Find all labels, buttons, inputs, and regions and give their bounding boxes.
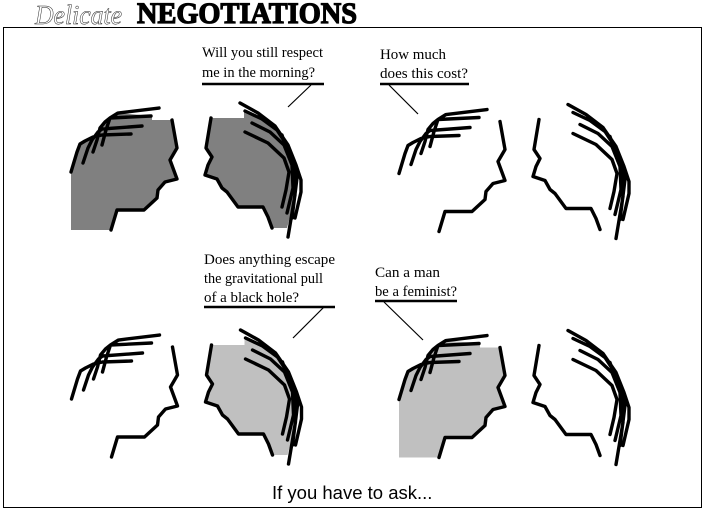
silhouette pair: right face light gray, bottom left — [72, 330, 302, 464]
speech callout: cost: How much — [380, 47, 446, 63]
caption: If you have to ask... — [272, 482, 432, 503]
speech callout: black hole: Does anything escape — [204, 252, 335, 268]
title: Delicate — [34, 0, 122, 30]
silhouette pair: left face light gray, bottom right — [399, 330, 629, 464]
speech callout: black hole — [204, 252, 335, 338]
speech callout: feminist: be a feminist? — [375, 284, 457, 300]
speech callout: black hole: of a black hole? — [204, 290, 299, 306]
speech callout: respect: me in the morning? — [202, 65, 315, 81]
silhouette pair: dark gray faces — [71, 103, 301, 237]
speech callout: cost: does this cost? — [380, 66, 468, 82]
speech callout: respect — [202, 45, 324, 107]
speech callout: feminist — [375, 265, 457, 340]
speech callout: black hole: the gravitational pull — [204, 271, 323, 287]
speech callout: respect: Will you still respect — [202, 45, 324, 61]
title — [34, 0, 357, 30]
speech callout: cost — [380, 47, 469, 114]
speech callout: feminist: Can a man — [375, 265, 440, 281]
silhouette pair: unfilled faces, top right — [399, 104, 629, 238]
